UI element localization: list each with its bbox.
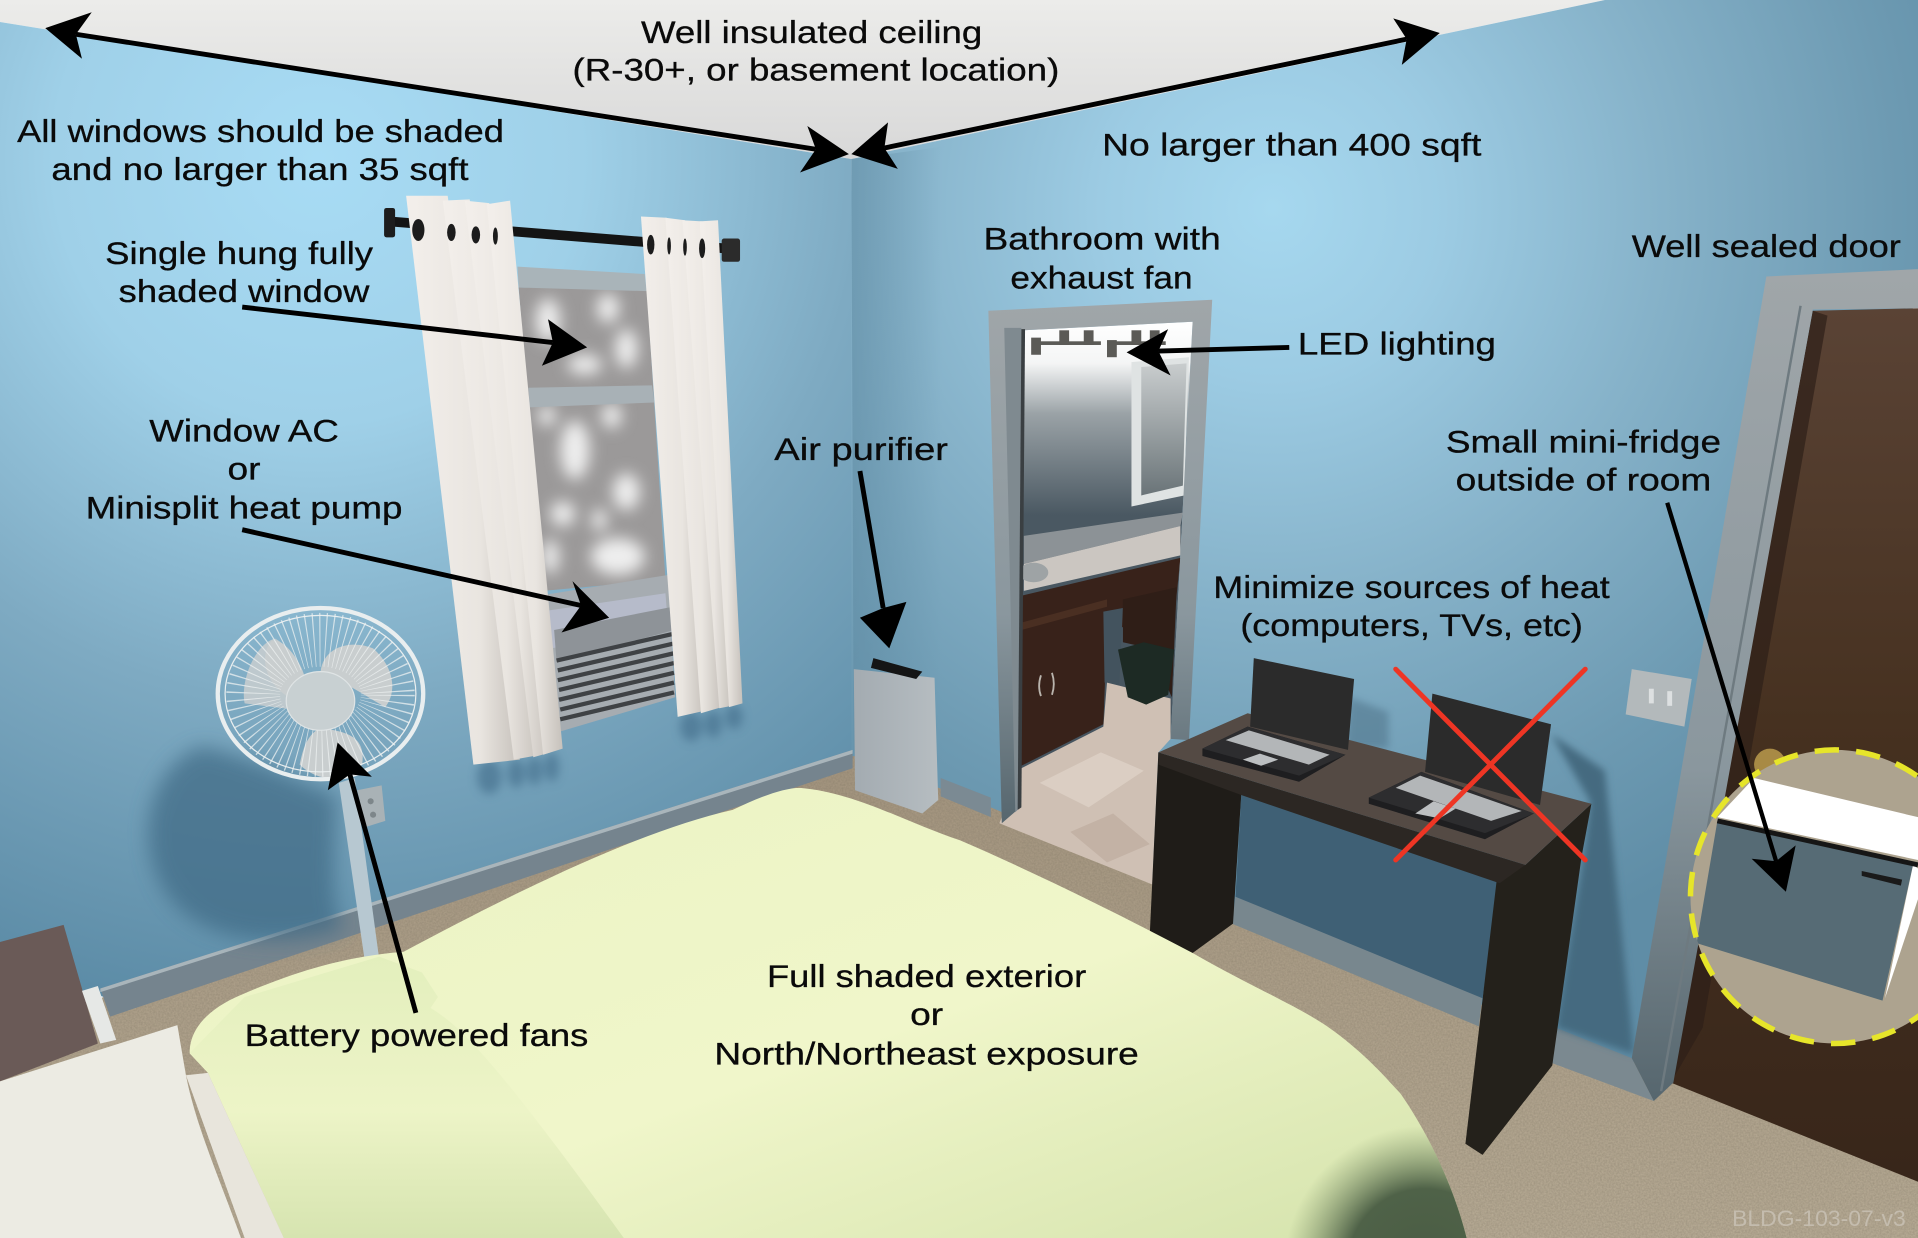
electrical outlet	[357, 785, 385, 827]
window AC unit	[547, 575, 675, 732]
arrow: battery fan	[328, 743, 416, 1013]
label: cooling: Window AC	[149, 413, 339, 449]
arrow: window	[242, 307, 587, 366]
vanity counter	[1019, 513, 1183, 591]
label: exposure: Full shaded exterior	[767, 958, 1087, 994]
label: exposure: or	[910, 996, 944, 1032]
baseboard below desk	[1232, 897, 1654, 1101]
right wall	[851, 0, 1918, 1077]
label: LED lighting: LED lighting	[1298, 326, 1496, 362]
ceiling	[0, 0, 1605, 159]
window	[517, 267, 675, 732]
label: cooling: or	[228, 451, 261, 487]
fridge top	[1717, 778, 1918, 860]
bathroom back wall with lights	[1021, 322, 1193, 783]
baseboard: left wall	[100, 750, 853, 1017]
air purifier	[854, 658, 991, 817]
desk left leg	[1150, 752, 1242, 953]
arrow: LED lighting	[1127, 329, 1289, 376]
desk top	[1158, 713, 1591, 865]
fridge body	[1697, 821, 1913, 1001]
shadow right of desk	[1551, 734, 1634, 1055]
shadow behind first laptop	[1346, 697, 1388, 749]
comforter	[171, 771, 1480, 1238]
label: mini-fridge	[1446, 424, 1721, 498]
label: single hung window: shaded window	[119, 273, 371, 309]
fan pole	[339, 778, 379, 959]
label: exposure: North/Northeast exposure	[714, 1035, 1139, 1071]
window frame top	[517, 267, 647, 294]
label: room size: No larger than 400 sqft	[1102, 126, 1482, 162]
label: heat sources: (computers, TVs, etc)	[1240, 607, 1583, 643]
label: bathroom	[983, 221, 1221, 296]
arrow: window AC	[242, 530, 609, 632]
carpet floor	[0, 756, 1918, 1238]
label: cooling: Minisplit heat pump	[86, 490, 402, 526]
label: windows	[17, 113, 504, 187]
label: windows: All windows should be shaded	[17, 113, 504, 149]
glass light patches	[536, 294, 645, 575]
label: door: Well sealed door	[1632, 228, 1901, 264]
curtain shadows	[477, 705, 742, 794]
fridge side	[1885, 865, 1918, 998]
dashed circle	[1690, 750, 1918, 1043]
inset carpet	[1688, 746, 1918, 1046]
inset: mini-fridge in dashed circle	[1688, 746, 1918, 1046]
label: fans: Battery powered fans	[245, 1017, 588, 1053]
label: mini-fridge: Small mini-fridge	[1446, 424, 1721, 460]
fan hub	[286, 672, 355, 730]
door frame	[1632, 269, 1918, 1101]
door knob	[1754, 749, 1786, 780]
label: single hung window: Single hung fully	[105, 235, 373, 271]
label: windows: and no larger than 35 sqft	[51, 151, 469, 187]
desk right leg	[1465, 804, 1591, 1155]
nightstand	[0, 925, 116, 1081]
desk with shadow	[1150, 697, 1634, 1155]
label: bathroom: Bathroom with	[983, 221, 1221, 257]
trash can	[1118, 642, 1174, 705]
meeting rail	[528, 385, 654, 407]
label: mini-fridge: outside of room	[1456, 462, 1711, 498]
laptop one	[1202, 658, 1354, 782]
bed with comforter	[171, 771, 1480, 1238]
arrow: air purifier	[860, 471, 906, 648]
left wall	[0, 22, 854, 997]
bathroom doorway	[988, 300, 1212, 884]
red cross over laptop	[1396, 669, 1585, 860]
window glass	[519, 287, 665, 591]
label: heat sources: Minimize sources of heat	[1213, 569, 1610, 605]
light fixtures	[1031, 330, 1166, 357]
shadow under desk	[1235, 790, 1501, 998]
arrow: ceiling left span	[45, 12, 849, 172]
door slab	[1671, 308, 1918, 1182]
curtain rod	[384, 208, 740, 262]
fan blades	[244, 639, 392, 778]
figure id: BLDG-103-07-v3	[1732, 1206, 1906, 1231]
standing fan	[218, 608, 423, 959]
left curtain	[406, 196, 563, 765]
vanity cabinets	[1021, 558, 1180, 766]
label: air purifier: Air purifier	[774, 431, 948, 467]
label: exposure	[714, 958, 1139, 1071]
label: cooling	[86, 413, 402, 526]
fan shadow on wall	[148, 746, 342, 940]
bathroom mirror	[1131, 357, 1189, 506]
door with frame	[1632, 269, 1918, 1182]
label: heat sources	[1213, 569, 1610, 643]
fridge handle	[1862, 871, 1902, 886]
pillow	[0, 1025, 284, 1238]
laptop two	[1369, 694, 1551, 839]
light switch	[1626, 669, 1692, 727]
label: bathroom: exhaust fan	[1010, 260, 1193, 296]
label: single hung window	[105, 235, 373, 309]
right curtain	[641, 217, 742, 717]
label: ceiling: Well insulated ceiling	[641, 14, 982, 50]
arrow: ceiling right span	[851, 18, 1440, 169]
arrow: mini-fridge	[1667, 503, 1796, 892]
label: ceiling: (R-30+, or basement location)	[572, 52, 1059, 88]
label: ceiling	[572, 14, 1059, 88]
door trim	[988, 300, 1212, 823]
fan cage	[218, 608, 423, 779]
bathroom tile floor	[999, 683, 1171, 884]
desk apron	[1158, 752, 1525, 883]
